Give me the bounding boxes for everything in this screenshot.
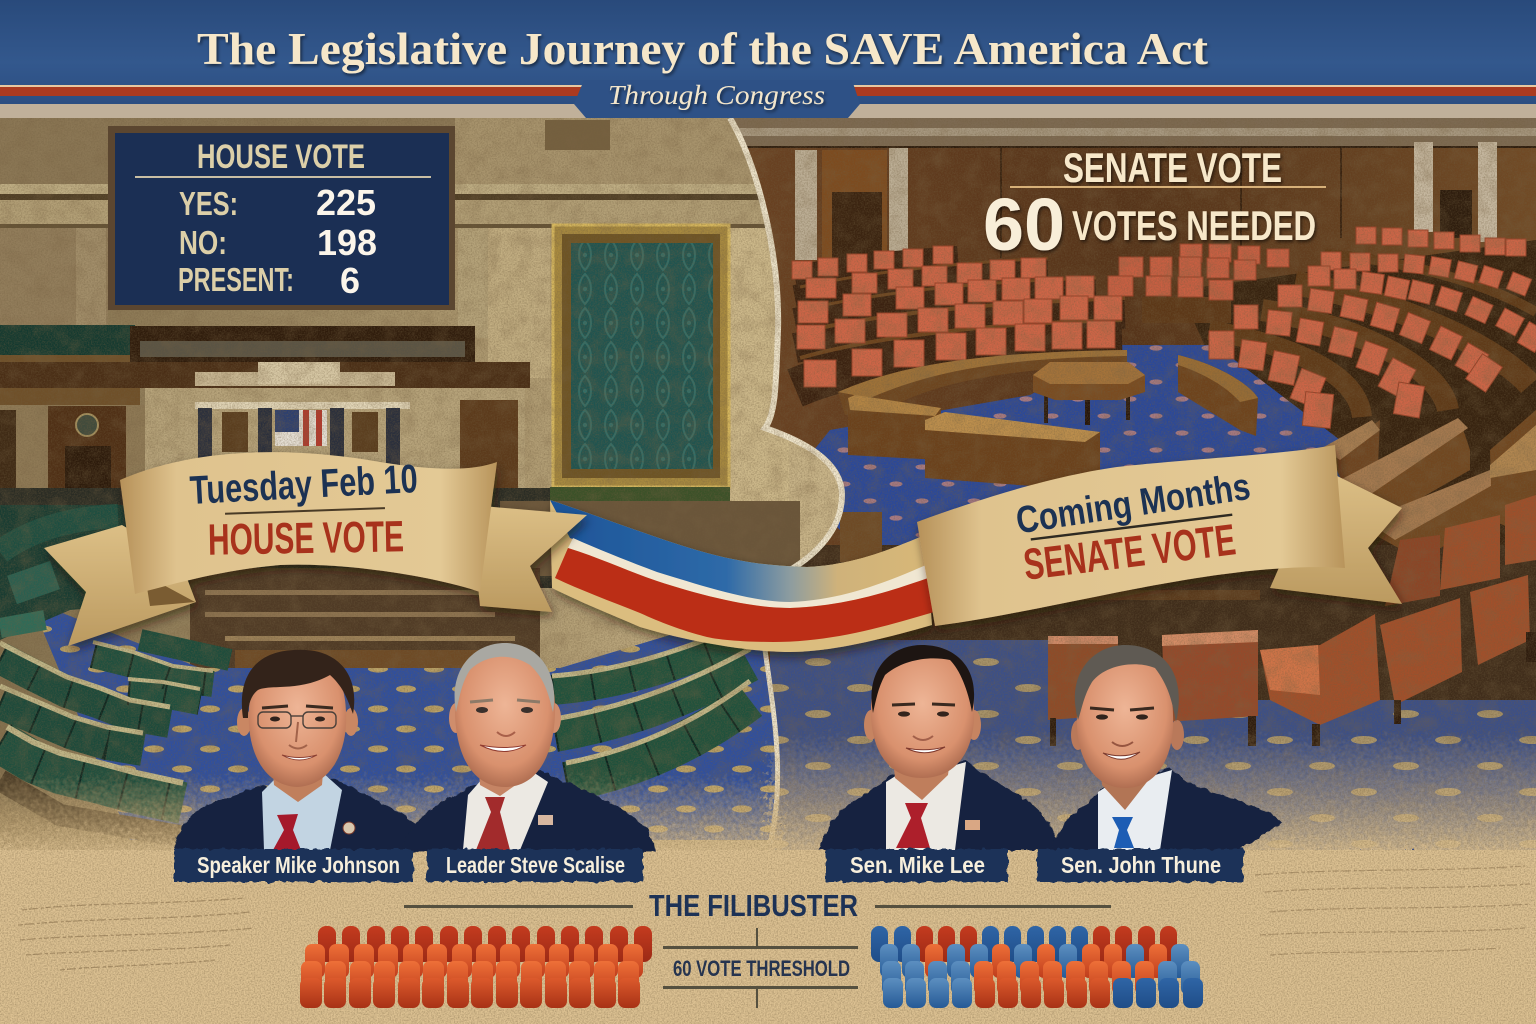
portrait: Leader Steve Scalise — [402, 643, 656, 852]
banner date: Tuesday Feb 10 — [189, 457, 419, 513]
center rear desk — [1184, 297, 1231, 323]
large foreground chairs — [1045, 495, 1536, 746]
green seats left — [0, 505, 230, 838]
text block: faint handwriting right — [1255, 866, 1530, 955]
heading: the filibuster: THE FILIBUSTER — [649, 888, 858, 923]
subtitle: Through Congress — [608, 80, 825, 110]
banner label: HOUSE VOTE — [208, 512, 404, 565]
panel: parchment fade under senate — [770, 735, 1536, 860]
yes value: 225 — [316, 182, 376, 223]
panel: title banner — [0, 0, 1536, 118]
name plate: Speaker Mike Johnson: Speaker Mike Johnson — [197, 852, 400, 878]
no value: 198 — [317, 222, 377, 263]
center rear chairs — [1108, 244, 1289, 300]
seat chart: all red block — [300, 926, 652, 1008]
yes label: YES: — [179, 185, 238, 222]
house carpet — [30, 600, 785, 840]
text block: faint handwriting left — [18, 898, 255, 970]
round table — [1033, 362, 1145, 425]
texture overlay: chamber mottling — [0, 118, 1536, 848]
callout: 60 vote threshold — [663, 928, 858, 1008]
wood desk arcs right — [1209, 254, 1536, 417]
votes needed: VOTES NEEDED — [1072, 202, 1316, 249]
panel: left-right chamber divider curve — [730, 118, 842, 845]
senate title: SENATE VOTE — [1063, 144, 1282, 191]
front curved desk — [838, 350, 1127, 415]
name plate: Sen. John Thune — [1037, 849, 1243, 882]
wall under damask panel — [500, 501, 800, 576]
wood block behind ribbon — [840, 512, 882, 562]
dark green gallery — [0, 325, 135, 357]
green seats right — [552, 624, 750, 782]
dark under-seat floor right — [1194, 240, 1536, 545]
banner date: Coming Months — [1013, 466, 1253, 542]
title: The Legislative Journey of the SAVE America Act — [197, 24, 1208, 74]
panel: senate vote heading — [983, 144, 1326, 266]
connecting ribbon: red white and blue — [550, 500, 934, 652]
banner label: SENATE VOTE — [1021, 515, 1238, 590]
curved end desk — [1178, 355, 1258, 436]
scoreboard heading: HOUSE VOTE — [197, 138, 365, 176]
present label: PRESENT: — [178, 261, 294, 298]
heading: the filibuster — [404, 888, 1111, 923]
flag — [275, 410, 327, 446]
banner: coming months senate vote — [917, 445, 1402, 626]
lower right curved desks — [1322, 410, 1536, 560]
sixty: 60 — [983, 183, 1065, 266]
presiding desks — [848, 395, 1100, 490]
panel: senate chamber scene — [720, 118, 1536, 858]
callout: 60 vote threshold: 60 VOTE THRESHOLD — [673, 956, 850, 981]
name plate: Sen. John Thune: Sen. John Thune — [1061, 852, 1221, 878]
name plate: Leader Steve Scalise: Leader Steve Scalise — [446, 852, 625, 878]
portrait: Sen. John Thune — [1052, 645, 1282, 850]
lower floor — [770, 545, 1536, 710]
portrait: Sen. Mike Lee — [820, 645, 1060, 850]
banner: tuesday house vote — [44, 452, 587, 646]
panel: parchment fade under house — [0, 775, 780, 860]
seat chart: mixed red and blue block — [871, 926, 1203, 1008]
name plate: Sen. Mike Lee — [826, 849, 1008, 882]
no label: NO: — [179, 224, 227, 261]
panel: house chamber scene — [0, 118, 860, 858]
senate carpet — [815, 345, 1340, 545]
portrait: Speaker Mike Johnson — [175, 650, 433, 852]
name plate: Leader Steve Scalise — [427, 849, 643, 882]
name plate: Speaker Mike Johnson — [174, 849, 413, 882]
panel: parchment base — [0, 850, 1536, 1024]
green damask panel — [550, 225, 730, 501]
present value: 6 — [340, 260, 360, 301]
chairs right arcs — [1209, 227, 1536, 428]
rostrum steps — [190, 568, 540, 670]
name plate: Sen. Mike Lee: Sen. Mike Lee — [850, 852, 985, 878]
panel: house vote scoreboard — [108, 126, 455, 310]
chairs left group — [792, 246, 1122, 387]
desk rows left group — [795, 258, 1125, 388]
